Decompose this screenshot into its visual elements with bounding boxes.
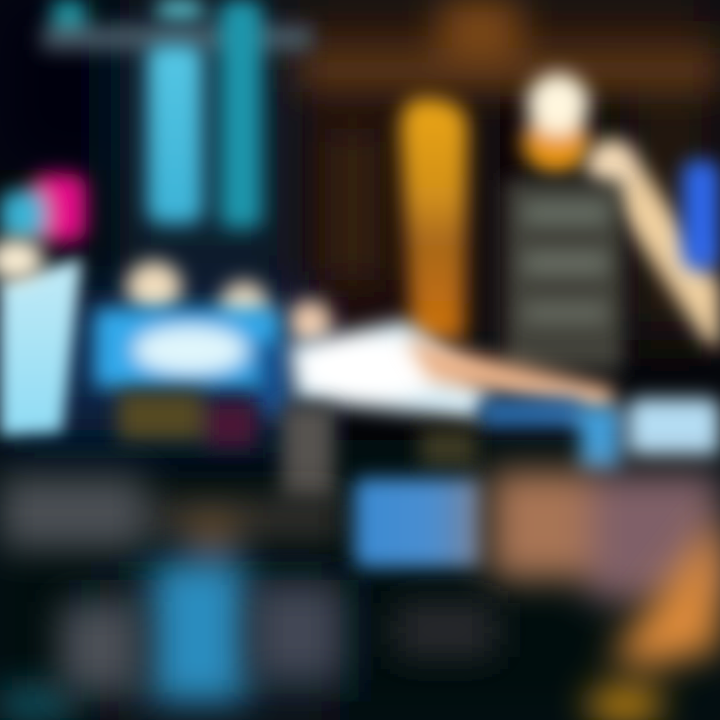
grey shelving bbox=[505, 180, 623, 370]
peach band bbox=[405, 338, 615, 418]
top left sign bbox=[42, 0, 312, 50]
floor reflection: peach bbox=[490, 470, 720, 602]
glowing lamp bbox=[522, 73, 590, 174]
blue counter panel bbox=[94, 308, 288, 416]
floor reflection: grey bbox=[60, 585, 496, 692]
grey left floor band bbox=[0, 475, 345, 550]
floor reflection: blue bbox=[354, 478, 482, 568]
bright white counter bbox=[288, 320, 490, 420]
top brown beams bbox=[300, 0, 720, 280]
orange vertical light bbox=[400, 98, 468, 340]
pale cyan panel bbox=[0, 258, 82, 436]
cream highlights bbox=[0, 238, 332, 344]
blue sign at right edge bbox=[682, 160, 720, 270]
floor reflection: orange bbox=[590, 515, 720, 720]
floor reflection: cyan bbox=[0, 518, 246, 720]
pink and blue sign at left bbox=[0, 174, 86, 242]
right blue reflections bbox=[480, 398, 720, 472]
diagonal cream beam bbox=[586, 139, 720, 350]
cyan vertical bars bbox=[147, 0, 262, 228]
dim objects under counter bbox=[118, 392, 476, 500]
